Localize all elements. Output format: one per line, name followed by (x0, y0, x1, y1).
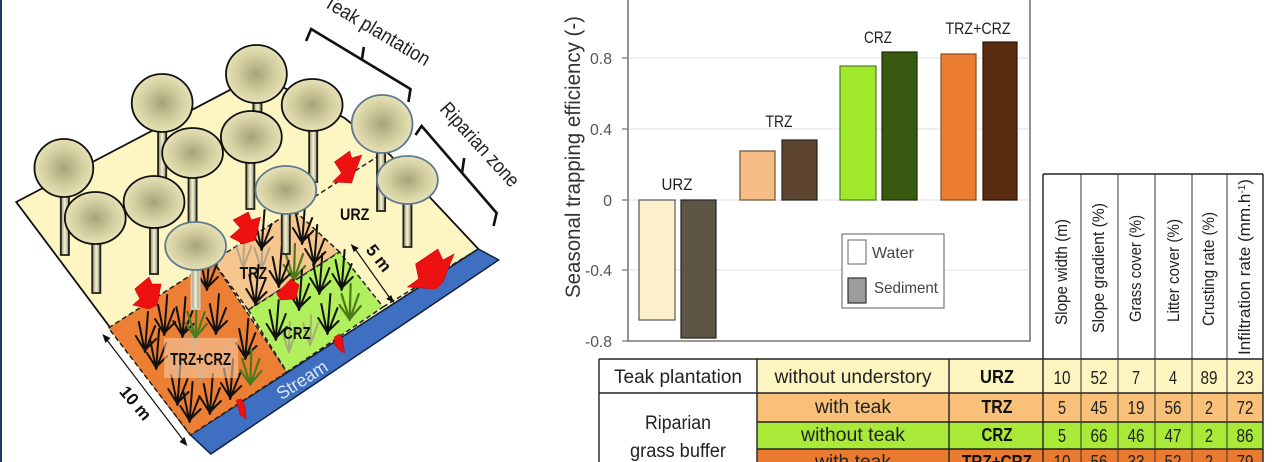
legend (842, 234, 944, 308)
zone label TRZ+CRZ (164, 338, 238, 378)
zone codes: TRZ (982, 397, 1012, 417)
y axis tick labels: 0.4 (590, 122, 612, 139)
tree row back (34, 45, 438, 309)
table values: 86 (1236, 426, 1254, 446)
rotated column headers (1052, 179, 1254, 355)
y axis tick labels: -0.4 (585, 263, 612, 280)
chart frame (628, 0, 1030, 341)
bracket: riparian zone: Riparian zone (435, 98, 524, 192)
bars TRZ+CRZ (941, 19, 1017, 200)
zone label TRZ+CRZ: TRZ+CRZ (170, 349, 231, 369)
rotated column headers: Slope gradient (%) (1089, 203, 1108, 333)
bars URZ (639, 175, 716, 338)
y axis tick labels: 0 (603, 193, 612, 210)
table: zone characteristics (599, 174, 1263, 462)
row labels: Riparian (645, 413, 711, 434)
stream (191, 249, 499, 454)
zone TRZ (213, 210, 340, 310)
diagram: riparian plot schematic (16, 0, 524, 454)
dimension: 5 m: 5 m (362, 241, 395, 276)
zone label CRZ: CRZ (283, 323, 311, 343)
dashed boundary of URZ (294, 155, 478, 307)
table values: 89 (1200, 368, 1218, 388)
zone CRZ (248, 252, 383, 372)
table values: 72 (1236, 398, 1254, 418)
bars TRZ: TRZ (766, 112, 792, 131)
rotated column headers: Litter cover (%) (1164, 219, 1183, 322)
zone label URZ: URZ (340, 205, 369, 224)
grass tufts (136, 204, 361, 422)
table values: 5 (1058, 426, 1066, 446)
bar chart: seasonal trapping efficiency (562, 0, 1030, 351)
table values: 46 (1128, 426, 1144, 446)
table values: 23 (1236, 368, 1254, 388)
bracket: riparian zone (416, 98, 524, 226)
table values: 47 (1164, 426, 1182, 446)
table values: 2 (1205, 426, 1213, 446)
table values: 5 (1058, 398, 1066, 418)
table values: 4 (1169, 368, 1177, 388)
legend: Sediment (874, 280, 939, 297)
rotated column headers: Infiltration rate (mm.h (1235, 194, 1254, 355)
table values: 66 (1090, 426, 1108, 446)
table values: 2 (1205, 398, 1213, 418)
y axis tick labels: 0.8 (590, 51, 612, 68)
bars URZ: URZ (662, 175, 692, 194)
y axis title: Seasonal trapping efficiency (-) (562, 16, 585, 298)
zone label TRZ: TRZ (240, 263, 267, 283)
red flow arrows (133, 151, 454, 419)
table values: 10 (1054, 368, 1070, 388)
rotated column headers: -1 (1237, 184, 1248, 194)
dimension: 10 m: 10 m (115, 382, 155, 424)
zone TRZ+CRZ (108, 261, 287, 435)
bars CRZ (840, 28, 917, 200)
zone codes: CRZ (982, 425, 1012, 445)
table row fills (599, 359, 757, 462)
table values: 7 (1132, 368, 1140, 388)
zone codes (962, 367, 1032, 462)
dimension: 5 m (351, 241, 395, 303)
table values: 45 (1090, 398, 1108, 418)
table values: 52 (1090, 368, 1108, 388)
table values: 56 (1164, 398, 1182, 418)
y axis tick labels (585, 51, 612, 351)
bars TRZ (740, 112, 817, 200)
table values (1054, 368, 1254, 462)
teak plantation field (16, 75, 478, 435)
row labels: with teak (814, 397, 892, 418)
rotated column headers: Crusting rate (%) (1199, 212, 1218, 326)
bracket: teak plantation (306, 0, 434, 102)
table values: 19 (1128, 398, 1144, 418)
row labels: without understory (773, 367, 932, 388)
zone codes: URZ (980, 367, 1014, 387)
bars TRZ+CRZ: TRZ+CRZ (946, 19, 1010, 38)
rotated column headers: ) (1235, 179, 1254, 185)
rotated column headers: Slope width (m) (1052, 219, 1071, 325)
row labels: Teak plantation (614, 367, 742, 388)
bars CRZ: CRZ (864, 28, 892, 47)
stream: Stream (273, 356, 331, 404)
left border line (0, 0, 2, 462)
legend: Water (872, 245, 915, 262)
table grid (599, 174, 1263, 462)
row labels: without teak (800, 425, 905, 446)
rotated column headers: Grass cover (%) (1126, 215, 1145, 322)
row labels (614, 367, 932, 462)
y axis tick labels: -0.8 (585, 334, 612, 351)
row labels: grass buffer (630, 441, 727, 462)
dimension: 10 m (102, 334, 187, 446)
